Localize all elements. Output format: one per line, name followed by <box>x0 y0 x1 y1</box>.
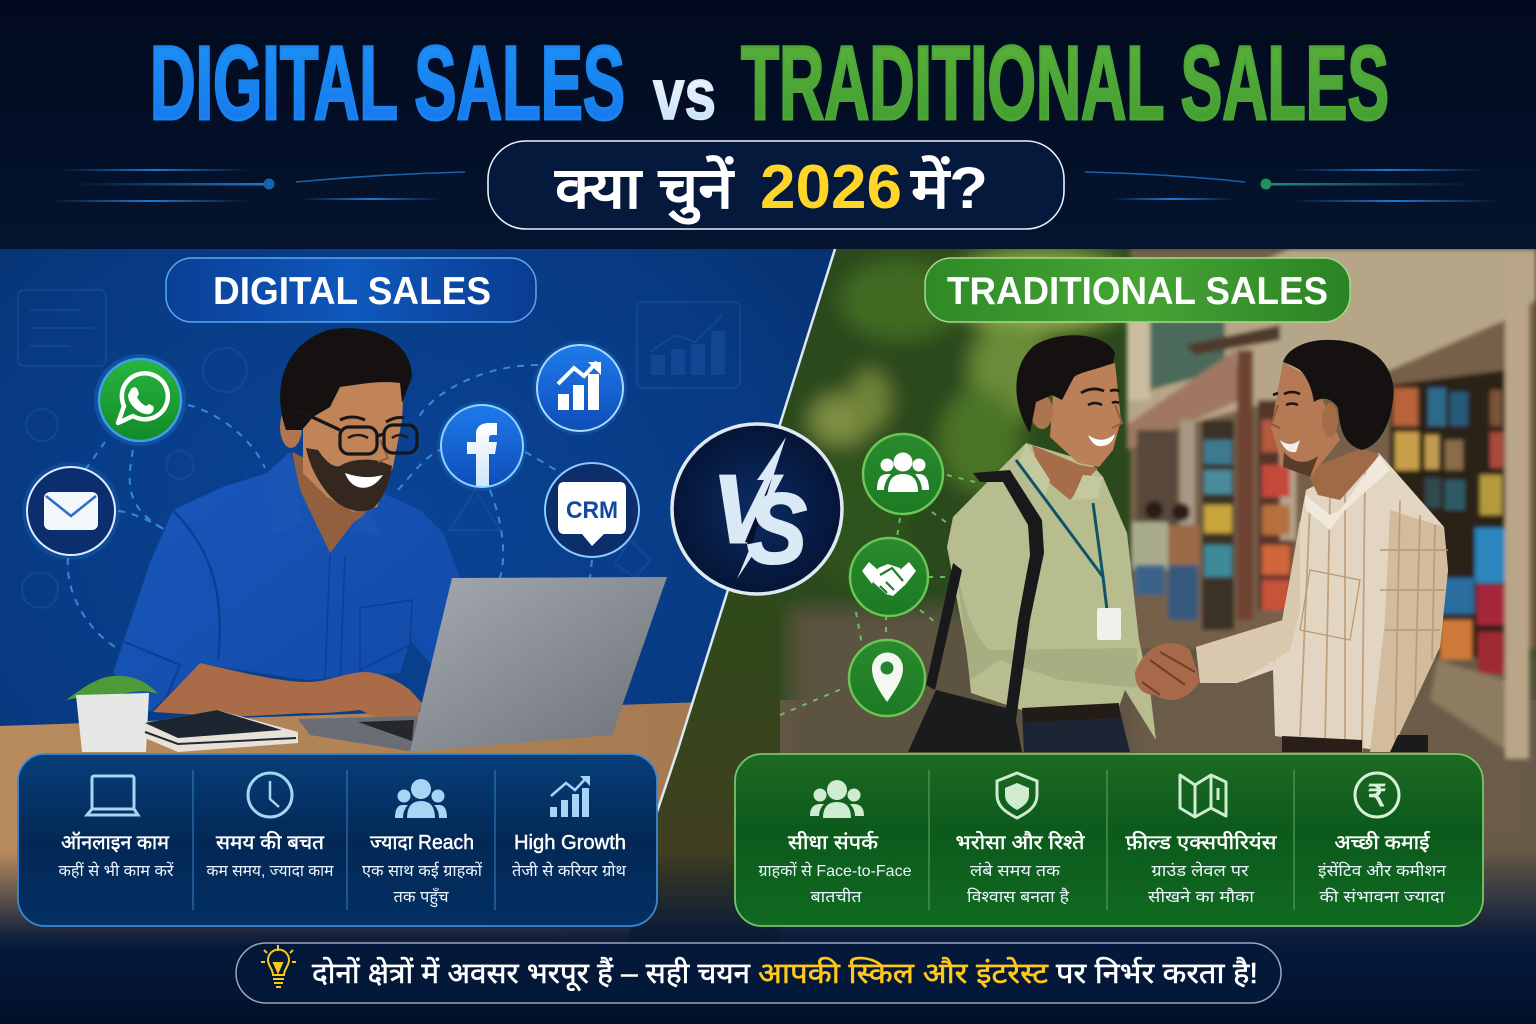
face <box>1271 362 1340 477</box>
notebook <box>145 710 298 752</box>
collar <box>1305 455 1390 530</box>
person: field salesman <box>908 335 1156 752</box>
benefit: time saving: कम समय, ज्यादा काम <box>206 863 334 880</box>
section heading: traditional sales <box>925 258 1350 322</box>
title <box>150 25 1389 142</box>
benefit: direct contact: सीधा संपर्क <box>788 831 879 854</box>
icon: location pin <box>849 640 925 716</box>
benefit: online work: कहीं से भी काम करें <box>58 861 174 880</box>
panel: traditional sales scene <box>630 249 1536 936</box>
faint background icons <box>18 290 740 608</box>
benefit: high growth: तेजी से करियर ग्रोथ <box>512 861 627 880</box>
subtitle pill: 2026 <box>760 153 902 222</box>
benefit: direct contact: ग्राहकों से Face-to-Face <box>758 861 912 880</box>
subtitle pill <box>488 141 1064 229</box>
icon: whatsapp <box>94 354 186 446</box>
desk <box>0 702 705 945</box>
callout: bottom message: आपकी स्किल और इंटरेस्ट <box>758 957 1049 990</box>
benefit: more reach: ज्यादा Reach <box>370 832 474 854</box>
forearm and hand <box>153 663 422 717</box>
callout: bottom message: पर निर्भर करता है! <box>1056 957 1258 990</box>
benefit: online work: ऑनलाइन काम <box>61 831 170 854</box>
id card <box>1097 608 1121 640</box>
decorative header lines left <box>50 169 465 202</box>
icon: crm <box>545 463 639 557</box>
icon: email <box>22 462 120 560</box>
icon: growth chart <box>533 341 627 435</box>
belt <box>1022 703 1120 722</box>
collar <box>267 452 290 473</box>
callout: bottom message <box>236 943 1281 1003</box>
vs badge <box>672 424 842 594</box>
bag strap <box>973 470 1044 720</box>
icon: light bulb <box>261 945 296 987</box>
benefit: time saving: समय की बचत <box>216 831 325 854</box>
shirt <box>947 443 1156 740</box>
subtitle pill: में? <box>910 155 988 221</box>
ground <box>780 700 1536 930</box>
face features <box>1271 392 1318 477</box>
shirt <box>113 452 462 712</box>
panel: digital sales scene <box>0 249 840 949</box>
diagonal divider <box>657 249 835 812</box>
benefit: high growth: High Growth <box>514 832 626 854</box>
section heading: traditional sales: TRADITIONAL SALES <box>947 270 1328 313</box>
benefit: good earning: इंसेंटिव और कमीशन <box>1318 861 1447 880</box>
shop shelves <box>1393 388 1505 674</box>
face <box>303 382 404 512</box>
collar <box>1018 443 1050 498</box>
title: vs <box>653 55 716 135</box>
title: DIGITAL SALES <box>150 25 625 142</box>
benefit: high growth <box>512 776 627 880</box>
benefit: field experience: ग्राउंड लेवल पर <box>1152 861 1249 880</box>
benefit: online work <box>58 776 174 880</box>
section heading: digital sales: DIGITAL SALES <box>213 270 491 313</box>
lanyard <box>1016 460 1107 610</box>
benefit: time saving <box>206 773 334 880</box>
ear <box>1322 403 1338 437</box>
benefit: more reach <box>362 779 483 908</box>
face <box>1050 363 1121 467</box>
header band <box>0 0 1536 249</box>
dashed connectors <box>68 365 595 650</box>
bag <box>908 690 1022 752</box>
person: digital professional <box>113 328 462 725</box>
eyes and brows <box>340 417 408 462</box>
hair <box>280 328 412 430</box>
glasses <box>297 410 417 454</box>
benefit: trust: भरोसा और रिश्ते <box>956 831 1085 854</box>
plant pot <box>66 676 158 752</box>
benefit: field experience: फ़ील्ड एक्सपीरियंस <box>1126 831 1277 854</box>
shop building <box>1127 249 1536 759</box>
neck <box>1306 448 1380 500</box>
vs badge: V <box>713 456 782 563</box>
belt <box>1282 736 1362 752</box>
benefit: direct contact <box>758 780 912 906</box>
benefit: good earning <box>1318 773 1447 906</box>
neck <box>1032 445 1098 500</box>
benefit: direct contact: बातचीत <box>810 887 862 906</box>
sleeve <box>1196 520 1300 683</box>
ear <box>280 415 302 448</box>
neck <box>292 452 378 553</box>
face features <box>1081 389 1122 446</box>
callout: bottom message: दोनों क्षेत्रों में अवसर भरपूर हैं – सही चयन <box>312 957 751 991</box>
panel: digital benefits <box>18 754 657 926</box>
benefit: more reach: तक पहुँच <box>394 887 449 908</box>
icon: crm: CRM <box>566 497 618 524</box>
shirt <box>1196 453 1448 752</box>
panel: traditional benefits <box>735 754 1483 926</box>
benefit: trust <box>956 773 1085 906</box>
hair <box>1283 340 1394 450</box>
benefit: good earning: अच्छी कमाई <box>1334 831 1431 854</box>
hair <box>1016 335 1115 433</box>
trees background <box>780 249 1536 753</box>
distant customers <box>1145 501 1163 519</box>
section heading: digital sales <box>166 258 536 322</box>
vs badge: S <box>747 473 807 585</box>
benefit: good earning: ₹ <box>1367 780 1387 813</box>
laptop <box>298 577 667 752</box>
ear <box>1032 397 1053 429</box>
person: shop owner <box>1196 340 1448 752</box>
handshake hands <box>1135 643 1200 700</box>
bottom fade <box>0 850 1536 1024</box>
trousers <box>1022 707 1130 752</box>
icon: facebook <box>437 401 527 491</box>
subtitle pill: क्या चुनें <box>554 155 735 225</box>
beard <box>306 448 392 511</box>
icon: handshake <box>850 538 928 616</box>
decorative header lines right <box>1085 169 1500 202</box>
benefit: good earning: की संभावना ज्यादा <box>1320 887 1445 906</box>
benefit: more reach: एक साथ कई ग्राहकों <box>362 861 483 880</box>
benefit: trust: लंबे समय तक <box>970 861 1061 880</box>
olive block <box>658 611 780 896</box>
dotted connectors <box>780 475 975 715</box>
icon: group <box>863 434 943 514</box>
benefit: trust: विश्वास बनता है <box>967 887 1070 906</box>
benefit: field experience: सीखने का मौका <box>1148 887 1255 906</box>
benefit: field experience <box>1126 775 1277 906</box>
